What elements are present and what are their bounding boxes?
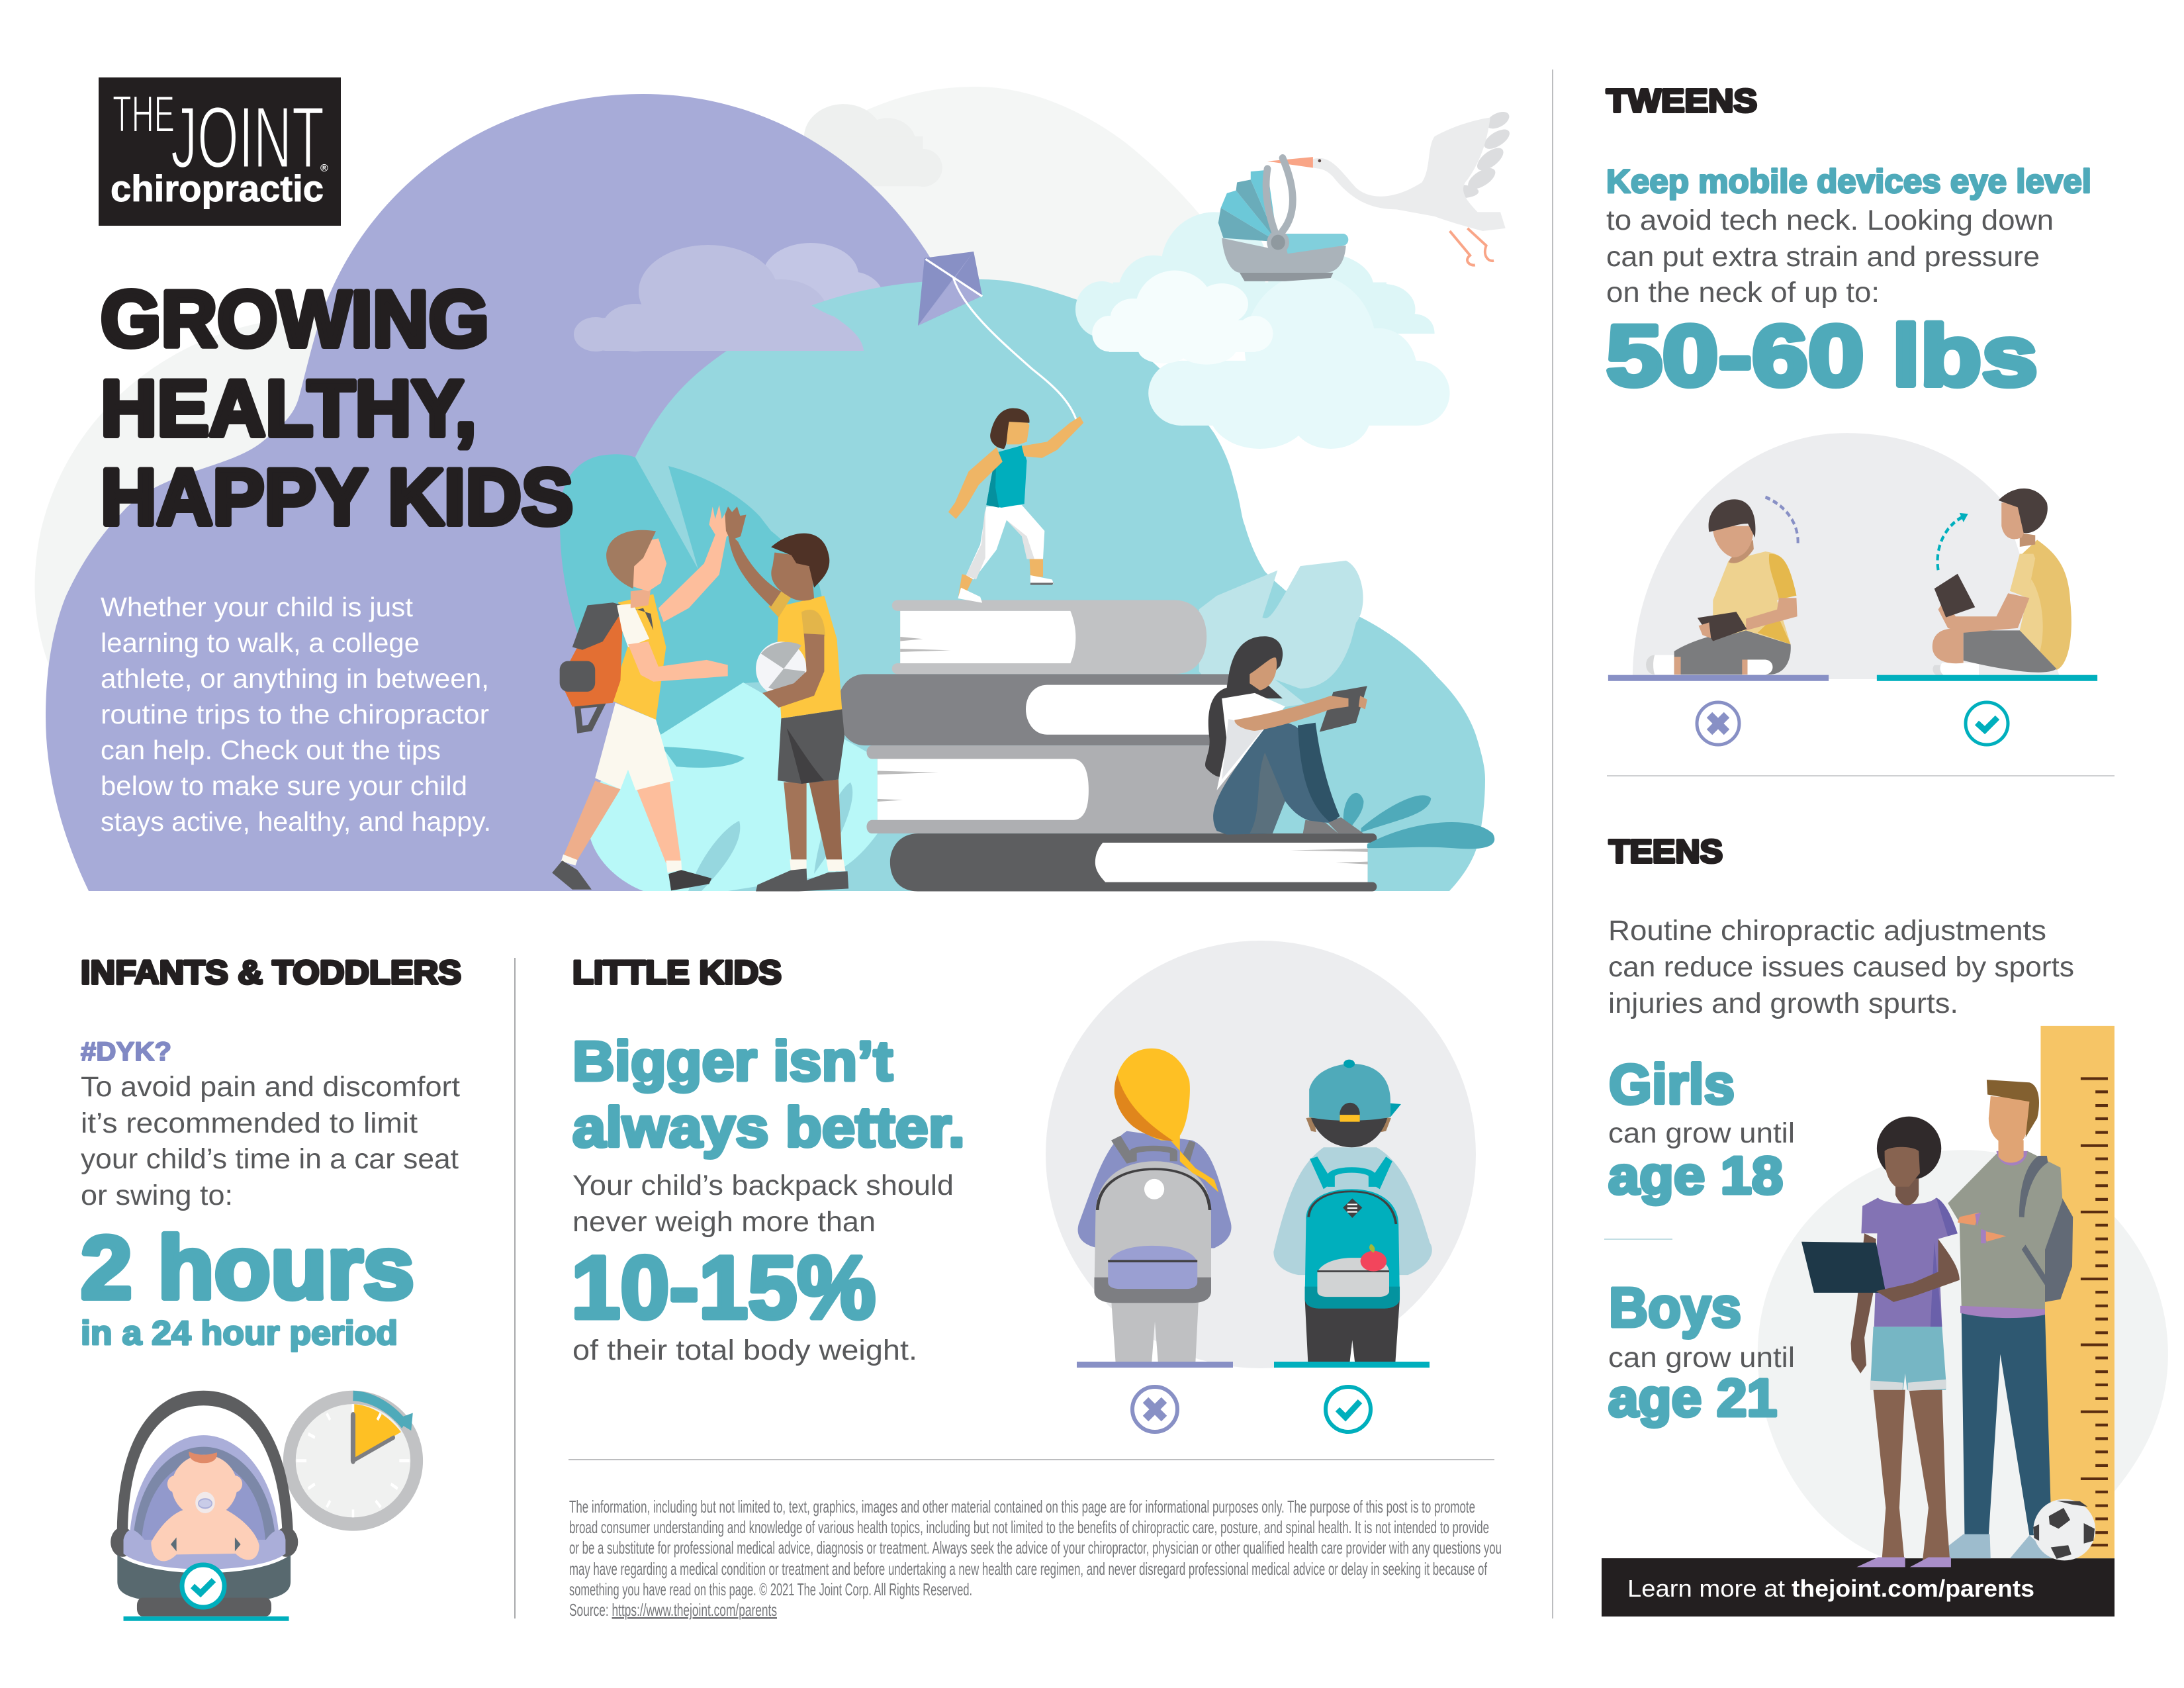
headline (572, 1030, 965, 1158)
panel: infants and toddlers (81, 954, 461, 1621)
panel: tweens (1606, 83, 2097, 745)
light plant behind books (1199, 561, 1363, 715)
boys stat: age 21 (1608, 1368, 1777, 1427)
body text: your child’s time in a car seat (81, 1143, 459, 1175)
caption: of their total body weight. (572, 1335, 917, 1366)
body text: injuries and growth spurts. (1608, 988, 1958, 1019)
logo: JOINT (171, 89, 324, 186)
icon: check (1966, 702, 2008, 745)
heading: TWEENS (1606, 83, 1757, 119)
grey circle (1758, 1150, 2168, 1558)
grey dome (1633, 433, 2060, 679)
body text: never weigh more than (572, 1206, 876, 1238)
body text: to avoid tech neck. Looking down (1606, 205, 2054, 236)
ground leaves (662, 747, 852, 891)
teens illustration (1758, 1026, 2168, 1567)
logo: chiropractic (111, 167, 324, 209)
divider above disclaimer (569, 1459, 1494, 1460)
figure: looking down (1646, 497, 1798, 675)
wrong bar (1077, 1362, 1233, 1368)
right bar (1877, 675, 2097, 681)
vertical divider right (1552, 70, 1553, 1618)
headline: Bigger isn’t (572, 1030, 893, 1092)
body text (1606, 205, 2054, 308)
figure: teen girl (1801, 1117, 1960, 1567)
stat: 50-60 lbs: 50-60 lbs (1606, 307, 2038, 404)
title: HAPPY KIDS (101, 453, 573, 541)
boys stat: Boys (1609, 1276, 1741, 1338)
teal hill (635, 279, 1485, 891)
footer call to action bar: Learn more at (1627, 1575, 1785, 1602)
purple clouds (574, 243, 884, 352)
hero intro text: athlete, or anything in between, (101, 663, 489, 694)
body text: on the neck of up to: (1606, 277, 1880, 308)
boys stat (1608, 1276, 1795, 1427)
body text: can reduce issues caused by sports (1608, 951, 2074, 983)
third book (867, 745, 1240, 833)
pale grey right hill (847, 87, 1211, 331)
logo: ® (320, 163, 328, 174)
ruler ticks (2081, 1078, 2108, 1545)
body text (81, 1071, 460, 1211)
second book (837, 674, 1240, 745)
figure: teen boy (1944, 1080, 2073, 1558)
baby basket (1218, 158, 1348, 281)
icon: cross (1697, 702, 1739, 745)
icon: check badge (182, 1565, 224, 1607)
grey circle (1046, 941, 1476, 1368)
purple hill (46, 94, 993, 891)
panel: hero illustration background (35, 87, 1485, 891)
footer call to action bar: thejoint.com/parents (1792, 1575, 2034, 1602)
disclaimer text: broad consumer understanding and knowledge of various health topics, including but not limited to the benefits of chiropractic care, posture, and spinal health. It is not intended to provide (569, 1517, 1489, 1537)
disclaimer text: Source: https://www.thejoint.com/parents (569, 1600, 777, 1620)
hashtag: #DYK? (81, 1037, 171, 1066)
footer call to action bar (1602, 1558, 2115, 1617)
figure: eye level (1933, 489, 2071, 677)
boys stat: can grow until (1608, 1342, 1795, 1374)
ruler (2040, 1026, 2115, 1558)
body text: it’s recommended to limit (81, 1107, 418, 1139)
purple cloud overlap on teal (727, 297, 864, 351)
hero intro text: Whether your child is just (101, 592, 414, 622)
disclaimer text: something you have read on this page. © 2021 The Joint Corp. All Rights Reserved. (569, 1579, 972, 1599)
girls stat (1608, 1053, 1795, 1205)
water plant (1343, 793, 1494, 849)
icon: cross (1132, 1387, 1177, 1432)
hero intro text (101, 592, 491, 837)
stat caption: in a 24 hour period (81, 1314, 398, 1352)
hero intro text: routine trips to the chiropractor (101, 699, 489, 729)
soccer ball (2033, 1499, 2095, 1560)
body text: To avoid pain and discomfort (81, 1071, 460, 1103)
figure: boy with correct backpack (1273, 1060, 1432, 1362)
figure: boy with backpack high five (552, 505, 729, 890)
disclaimer text: or be a substitute for professional medical advice, diagnosis or treatment. Always seek the advice of your chiropractor, physician or other qualified health care provider with any questions you (569, 1538, 1502, 1558)
logo (99, 77, 341, 226)
body text: Routine chiropractic adjustments (1608, 915, 2046, 947)
disclaimer text (569, 1497, 1502, 1620)
hero intro text: stays active, healthy, and happy. (101, 806, 491, 837)
girls stat: age 18 (1608, 1146, 1783, 1205)
tip headline: Keep mobile devices eye level (1606, 163, 2091, 200)
body text: can put extra strain and pressure (1606, 241, 2040, 273)
heading: LITTLE KIDS (572, 954, 782, 991)
bottom book (890, 833, 1377, 891)
kite (918, 252, 1079, 427)
vertical divider left (514, 958, 516, 1618)
pale grey left hill (35, 317, 331, 682)
heading: TEENS (1609, 834, 1723, 870)
tweens illustration (1608, 433, 2097, 681)
wrong bar (1608, 675, 1829, 681)
hero intro text: below to make sure your child (101, 771, 467, 801)
body text (1608, 915, 2074, 1019)
illustration: baby in car seat (111, 1398, 298, 1621)
stork (1267, 109, 1512, 265)
right bar (1274, 1362, 1430, 1368)
hero intro text: can help. Check out the tips (101, 735, 441, 765)
pale cyan cloud rear (1075, 212, 1435, 338)
figure: girl reading tablet (1205, 636, 1367, 835)
panel: teens (1602, 834, 2168, 1617)
heading: INFANTS & TODDLERS (81, 954, 461, 991)
girls stat: can grow until (1608, 1117, 1795, 1149)
disclaimer text: The information, including but not limited to, text, graphics, images and other material contained on this page are for informational purposes only. The purpose of this post is to promote (569, 1497, 1475, 1517)
illustration: books stack (837, 561, 1494, 891)
figure: girl with heavy backpack (1078, 1049, 1232, 1362)
grey cloud (804, 104, 942, 187)
icon: clock (283, 1391, 423, 1531)
divider tweens teens (1607, 775, 2115, 776)
stat: 2 hours: 2 hours (81, 1219, 414, 1317)
title: GROWING (101, 275, 489, 363)
disclaimer text: may have regarding a medical condition or treatment and before undertaking a new health care regimen, and never disregard professional medical advice or delay in seeking it because of (569, 1559, 1487, 1579)
figure: boy with ball high five (725, 506, 848, 891)
top book (892, 600, 1206, 674)
illustration: stork carrying baby basket (1218, 109, 1512, 281)
icon: check (1326, 1387, 1371, 1432)
dark teal leaf (560, 454, 839, 735)
body text: Your child’s backpack should (572, 1170, 954, 1201)
figure: child flying kite (948, 408, 1083, 603)
small front cloud (1092, 271, 1273, 365)
panel: little kids (571, 941, 1476, 1432)
large white cloud (1148, 274, 1450, 449)
stat: 10-15%: 10-15% (571, 1239, 876, 1337)
title: HEALTHY, (101, 364, 477, 453)
title (101, 275, 573, 541)
body text: or swing to: (81, 1180, 233, 1211)
hero intro text: learning to walk, a college (101, 628, 420, 658)
logo: THE (113, 85, 175, 143)
body text (572, 1170, 954, 1238)
short divider (1604, 1239, 1672, 1240)
headline: always better. (572, 1096, 965, 1158)
girls stat: Girls (1609, 1053, 1735, 1115)
light cyan ground (588, 682, 878, 891)
